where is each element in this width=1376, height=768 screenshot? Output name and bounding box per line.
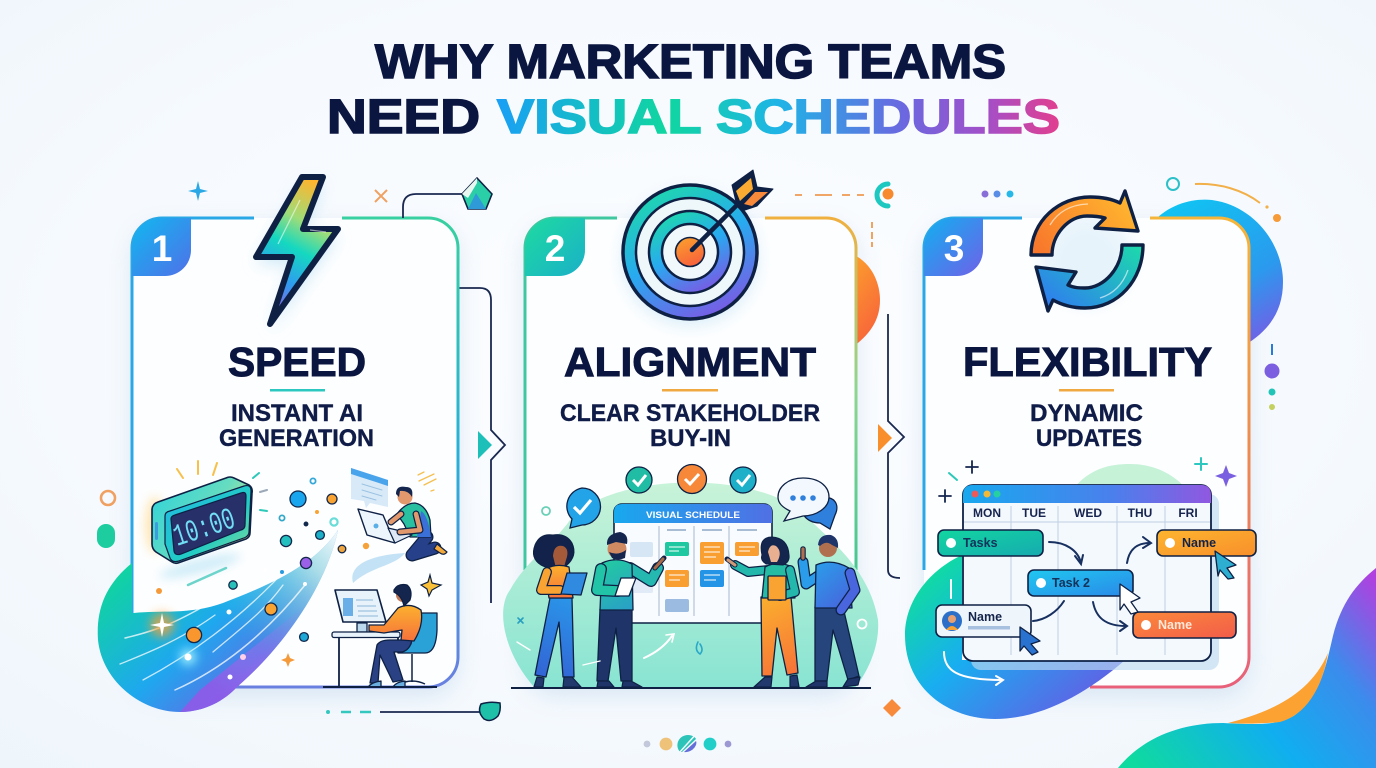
calendar: MON (973, 506, 1001, 520)
title: NEED (327, 91, 480, 144)
number badge 3: 3 (944, 228, 964, 269)
particles (156, 478, 369, 667)
person on flying laptop (351, 468, 447, 583)
number badge 2: 2 (545, 228, 565, 269)
decoration top of card 1 (188, 178, 492, 218)
task bar: name orange: Name (1182, 536, 1216, 550)
task bar: name orange (1157, 530, 1256, 556)
subheading: instant ai generation (219, 400, 374, 452)
number badge 1: 1 (152, 228, 172, 269)
task card: name with avatar (936, 605, 1031, 637)
panel: speed card (98, 177, 458, 712)
task bar: tasks: Tasks (963, 536, 998, 550)
decoration top of card 2 (795, 184, 894, 247)
calendar: THU (1128, 506, 1152, 520)
card 1 body (132, 218, 458, 687)
ground line (323, 686, 437, 688)
corner wave bottom right (1118, 568, 1376, 768)
task bar: task 2 (1028, 570, 1133, 596)
subheading: instant ai generation: INSTANT AI (231, 400, 363, 427)
blob: card 3 blue circle (1153, 200, 1283, 345)
blob: card 2 orange (850, 253, 880, 349)
subheading: dynamic updates: DYNAMIC (1030, 400, 1143, 427)
underline (1059, 389, 1114, 392)
person 2: man with beard (597, 532, 664, 687)
bottom pagination dots (644, 733, 731, 753)
diamond (883, 699, 901, 717)
number badge 2 (525, 218, 585, 276)
card shadows (132, 226, 1249, 696)
title: VISUAL SCHEDULES (497, 91, 1060, 144)
green mound (503, 482, 878, 688)
visual schedule board (614, 504, 772, 623)
decoration below card 1 (326, 702, 500, 720)
task bar: name red (1133, 612, 1236, 638)
speed swoosh (98, 530, 338, 712)
person 3: woman with book (727, 537, 799, 687)
underline (662, 389, 718, 392)
icon: refresh arrows (1031, 191, 1143, 311)
person at desk (332, 585, 437, 687)
underline (270, 389, 325, 392)
subheading: clear stakeholder buy-in (560, 400, 820, 452)
card 3 border (924, 218, 1249, 687)
digital clock 10:00 (145, 461, 267, 585)
subheading: instant ai generation: GENERATION (219, 425, 374, 452)
panel: flexibility card (905, 191, 1256, 719)
card 3 body (924, 218, 1249, 687)
card 2 body (525, 218, 856, 687)
visual schedule board: VISUAL SCHEDULE (646, 510, 741, 521)
decoration right of card 3 (1264, 344, 1280, 410)
speech bubble check (567, 488, 600, 528)
cursors (1020, 551, 1236, 655)
mound details (517, 507, 866, 665)
calendar: TUE (1022, 506, 1046, 520)
task bar: tasks (938, 530, 1043, 556)
swoosh arrow (944, 580, 1003, 685)
calendar: WED (1074, 506, 1102, 520)
green hill behind calendar (1072, 464, 1187, 490)
task bar: task 2: Task 2 (1052, 576, 1090, 590)
decoration around calendar (939, 458, 1237, 502)
check badges (626, 464, 756, 494)
speech bubbles (778, 478, 837, 529)
person 4: man pointing (803, 535, 860, 687)
heading: alignment: ALIGNMENT (564, 339, 816, 385)
task bar: name red: Name (1158, 618, 1192, 632)
panel: alignment card (503, 170, 878, 688)
card 1 border (132, 218, 458, 687)
subheading: clear stakeholder buy-in: CLEAR STAKEHOLDER (560, 400, 820, 427)
connector: card 1 to card 2 (458, 288, 505, 603)
card 3 swoosh (905, 555, 1125, 719)
icon: target with arrow (622, 170, 773, 326)
heading: flexibility: FLEXIBILITY (963, 339, 1212, 385)
heading: speed: SPEED (228, 339, 366, 385)
subheading: clear stakeholder buy-in: BUY-IN (650, 425, 731, 452)
number badge 1 (132, 218, 191, 276)
flow arrows (1033, 537, 1151, 631)
icon: lightning bolt (256, 177, 338, 332)
card 2 border (525, 218, 856, 570)
calendar: FRI (1178, 506, 1198, 520)
task card: name with avatar: Name (968, 610, 1002, 624)
person 1: woman with tablet (533, 535, 587, 687)
digital clock 10:00: 10:00 (169, 503, 240, 556)
number badge 3 (924, 218, 983, 276)
title: WHY MARKETING TEAMS (375, 36, 1006, 89)
decoration left of card 1 (97, 491, 115, 548)
title (327, 36, 1060, 144)
sparkle (421, 575, 441, 596)
calendar (963, 485, 1219, 670)
ground line (511, 687, 871, 689)
connector: card 2 to card 3 (878, 314, 904, 578)
subheading: dynamic updates: UPDATES (1036, 425, 1142, 452)
subheading: dynamic updates (1030, 400, 1143, 452)
decoration top of card 3 (982, 178, 1281, 222)
